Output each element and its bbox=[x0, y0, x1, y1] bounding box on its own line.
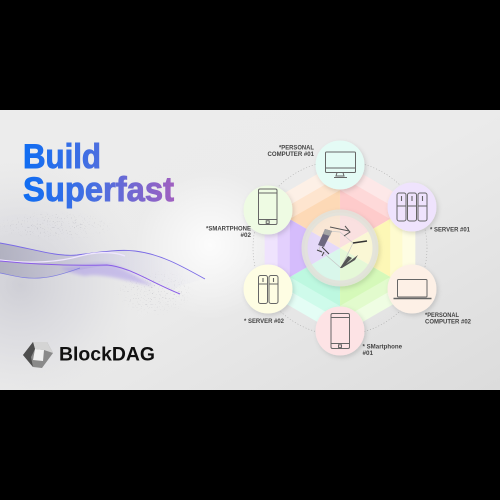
icon: phone bbox=[258, 189, 277, 224]
label: smartphone 02: *SMARTPHONE bbox=[206, 226, 251, 232]
node: personal computer 01 bbox=[316, 140, 364, 190]
label: computer 01: COMPUTER #01 bbox=[268, 152, 315, 158]
icon: cube logo bbox=[23, 342, 53, 368]
center glass hub bbox=[304, 212, 376, 284]
purple wave bbox=[0, 243, 205, 294]
particle dust bbox=[0, 211, 195, 316]
label: server 01: * SERVER #01 bbox=[430, 228, 471, 234]
sector: purple bbox=[227, 183, 340, 292]
label: personal computer 01: *PERSONAL bbox=[279, 146, 314, 152]
label: computer 02: COMPUTER #02 bbox=[425, 320, 472, 326]
icon: laptop bbox=[394, 280, 432, 298]
sector: green bbox=[302, 248, 415, 357]
sector: yellow bbox=[340, 204, 453, 313]
node: smartphone 02 bbox=[244, 186, 292, 234]
icon: phone bbox=[331, 314, 350, 348]
title bbox=[23, 138, 174, 209]
title: Superfast bbox=[23, 171, 174, 209]
wordmark: BlockDAG bbox=[59, 344, 155, 366]
label: personal computer 02: *PERSONAL bbox=[425, 313, 459, 319]
dotted ring bbox=[253, 161, 427, 335]
hexagon chart bbox=[227, 139, 453, 357]
node: server 01 bbox=[388, 182, 436, 232]
labels bbox=[206, 146, 472, 357]
label: number 02: #02 bbox=[240, 233, 252, 239]
icon: monitor bbox=[326, 152, 356, 178]
node: personal computer 02 bbox=[388, 264, 436, 314]
icon: three servers bbox=[397, 193, 427, 221]
icon: shattered cube bbox=[317, 226, 367, 268]
background panel bbox=[0, 110, 500, 390]
label: smartphone 01: * SMartphone bbox=[362, 344, 403, 350]
node: smartphone 01 bbox=[316, 306, 364, 356]
label: number 01: #01 bbox=[362, 351, 374, 357]
label: server 02: * SERVER #02 bbox=[244, 319, 285, 325]
icon: two servers bbox=[258, 276, 278, 304]
node: server 02 bbox=[244, 264, 292, 314]
title: Build bbox=[23, 138, 101, 176]
sector: teal bbox=[265, 248, 340, 335]
sector: pink bbox=[340, 161, 415, 248]
sector: orange bbox=[265, 139, 378, 248]
logo: BlockDAG bbox=[23, 342, 155, 368]
